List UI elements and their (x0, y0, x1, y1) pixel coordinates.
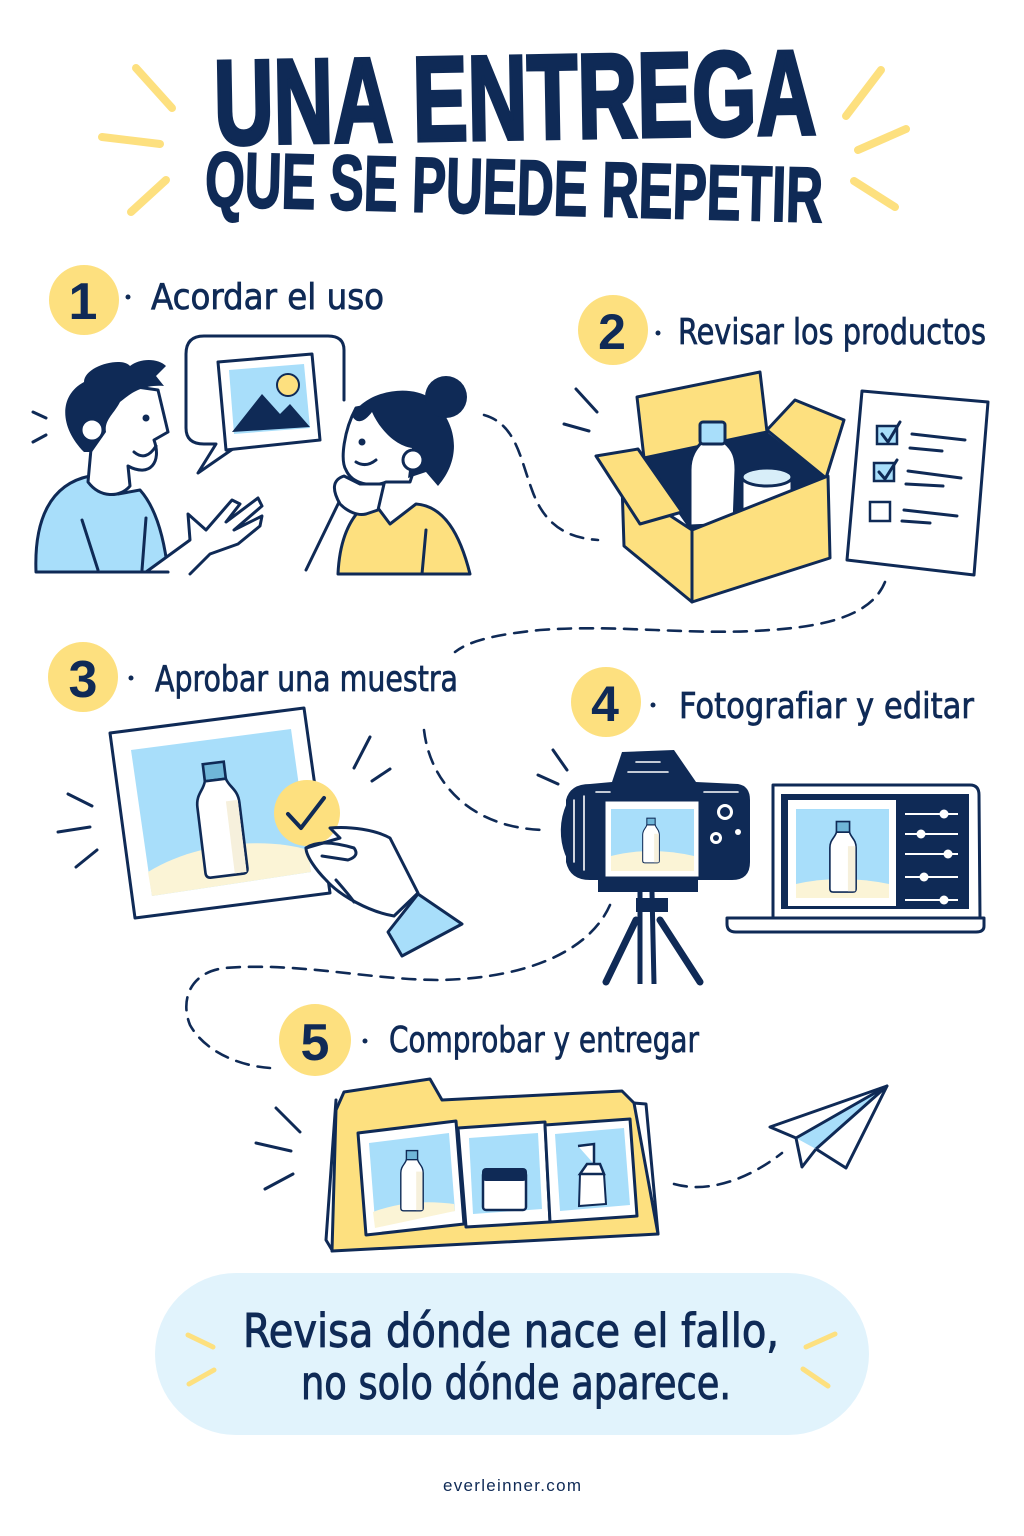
callout rays (188, 1334, 835, 1386)
photo 3 (545, 1119, 637, 1222)
badge 4 (571, 667, 641, 737)
step 1 heading (49, 265, 384, 335)
callout (155, 1273, 869, 1435)
step 4 heading: Fotografiar y editar (679, 686, 975, 727)
step 3 heading (48, 642, 458, 712)
badge 3: 3 (69, 651, 97, 709)
photo 2 (458, 1122, 550, 1227)
motion ticks (33, 412, 46, 442)
right flap (767, 400, 844, 478)
paper plane (770, 1086, 887, 1168)
photo frame (110, 708, 330, 918)
motion ticks (538, 750, 567, 784)
step 4 heading (571, 667, 975, 737)
title accent rays (102, 68, 906, 212)
illustration: folder with photos and paper plane (256, 1079, 887, 1251)
bottle (192, 760, 248, 878)
dashed path 1 to 2 (484, 415, 598, 540)
motion ticks (58, 737, 390, 867)
step 2 heading: Revisar los productos (678, 312, 986, 353)
badge 4: 4 (591, 676, 619, 732)
callout background (155, 1273, 869, 1435)
motion ticks (564, 389, 597, 431)
left flap (596, 449, 682, 524)
check badge (274, 780, 340, 846)
badge 1 (49, 265, 119, 335)
badge 1: 1 (69, 273, 97, 331)
illustration: approved sample photo (58, 708, 462, 956)
folder (332, 1079, 658, 1251)
hand (306, 827, 462, 956)
callout: no solo dónde aparece. (301, 1356, 731, 1410)
speech bubble (186, 336, 344, 473)
title (204, 26, 824, 239)
dashed path 4 to 5 (186, 905, 610, 1068)
man (36, 360, 262, 574)
illustration: two people talking about an image (33, 336, 470, 574)
box front (622, 476, 830, 602)
footer url: everleinner.com (443, 1476, 581, 1495)
badge 2: 2 (598, 304, 626, 360)
picture card (218, 354, 320, 450)
motion ticks (256, 1108, 300, 1189)
illustration: camera on tripod and laptop (538, 750, 984, 984)
illustration: open box and checklist (564, 372, 988, 602)
dashed path 3 to 4 (424, 730, 544, 830)
bottle (690, 422, 736, 526)
badge 3 (48, 642, 118, 712)
photo 1 (358, 1121, 464, 1235)
step 5 heading (279, 1004, 700, 1076)
back flap (637, 372, 767, 458)
tripod (606, 892, 700, 984)
step 1 heading: Acordar el uso (151, 277, 384, 318)
jar (742, 468, 792, 514)
checklist (847, 391, 988, 575)
badge 2 (578, 295, 648, 365)
step 5 heading: Comprobar y entregar (389, 1020, 700, 1061)
dashed path 2 to 3 (455, 582, 885, 652)
woman (306, 376, 470, 574)
step 3 heading: Aprobar una muestra (155, 659, 458, 700)
dashed path to plane (674, 1153, 782, 1187)
badge 5: 5 (301, 1014, 329, 1072)
laptop (727, 785, 984, 932)
camera (564, 750, 750, 892)
box interior (640, 432, 826, 530)
callout text: Revisa dónde nace el fallo, (243, 1304, 779, 1358)
folder back layer (326, 1100, 658, 1250)
badge 5 (279, 1004, 351, 1076)
step 2 heading (578, 295, 986, 365)
